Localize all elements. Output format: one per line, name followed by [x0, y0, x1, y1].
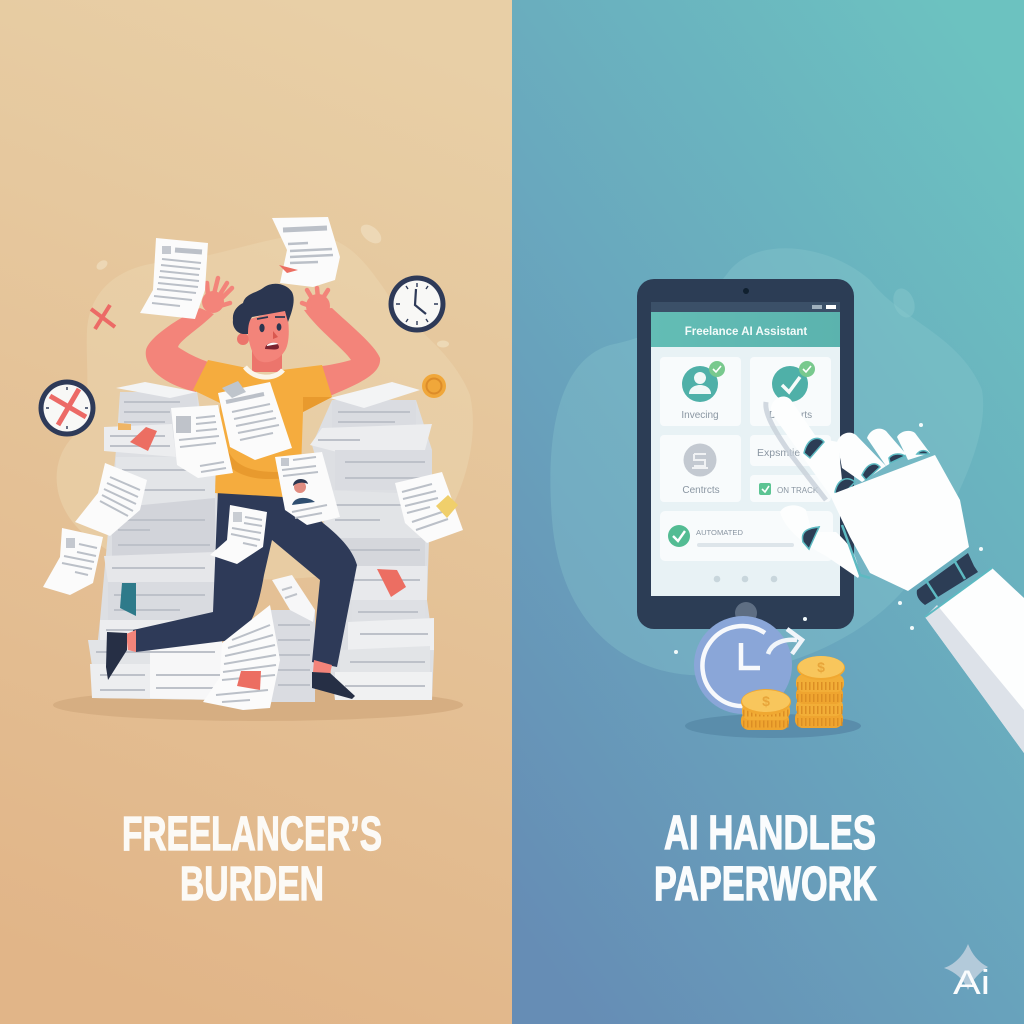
heading: AI handles paperwork: AI HANDLES [664, 807, 876, 860]
thumb [780, 505, 859, 578]
logo: AI star [944, 944, 990, 1002]
card: automated: AUTOMATED [696, 528, 743, 537]
sparkles [674, 423, 983, 654]
palm edge [842, 525, 870, 578]
heading: AI handles paperwork [654, 807, 877, 911]
heading: freelancer's burden: BURDEN [180, 858, 324, 911]
left background [0, 0, 512, 1024]
forearm [925, 568, 1024, 753]
tablet body [637, 279, 854, 629]
paper: resume with portrait [275, 452, 340, 525]
neck [252, 345, 282, 372]
floor shadow [685, 714, 861, 738]
card: invoicing: Invecing [681, 410, 719, 421]
small stack: $ [762, 693, 770, 709]
logo: AI star: Ai [953, 964, 990, 1002]
screen [651, 302, 840, 596]
tablet [637, 279, 854, 629]
left hand [202, 278, 232, 313]
card: documents: D [769, 410, 776, 421]
shirt [193, 360, 332, 498]
mouth [265, 343, 279, 350]
pagination dots [714, 576, 777, 582]
coin stacks [741, 656, 845, 730]
paper: top centre [272, 217, 340, 287]
card: documents: rts [801, 410, 812, 421]
right foot and shoe [312, 660, 355, 699]
index finger [771, 397, 842, 498]
sticky tabs [118, 423, 406, 616]
heading: freelancer's burden [122, 808, 382, 911]
wrist band [917, 553, 978, 605]
paper: right [395, 472, 463, 543]
right arm [304, 308, 380, 396]
paper: bottom left [43, 528, 103, 595]
card: contracts: Centrcts [682, 485, 720, 496]
dark finger joints [802, 438, 929, 549]
left arm [146, 308, 214, 392]
left foot and shoe [106, 630, 136, 680]
card: expenses: Expsmtie [757, 447, 800, 459]
trousers [133, 490, 357, 667]
nose [273, 331, 278, 339]
paper: bottom centre [203, 605, 280, 710]
card: expenses [750, 435, 831, 466]
card: on track [750, 475, 831, 502]
icon: coin [422, 374, 446, 398]
person [106, 278, 380, 699]
paper: on trousers [210, 505, 267, 564]
index finger shadow [766, 402, 826, 500]
camera [743, 288, 749, 294]
card: documents [750, 357, 831, 426]
finger four [897, 431, 930, 460]
large stack: $ [817, 659, 825, 675]
card: automated [660, 511, 833, 561]
icon: crossed clock left [38, 380, 96, 436]
app header: Freelance AI Assistant [685, 326, 807, 338]
app header [651, 312, 840, 347]
icon: red cross [91, 305, 115, 329]
heading: freelancer's burden: FREELANCER’S [122, 808, 382, 861]
card: invoicing [660, 357, 741, 426]
palm [830, 455, 969, 591]
shirt shadow [226, 397, 332, 479]
ear [237, 333, 249, 345]
dark thumb joint [802, 527, 819, 549]
face [247, 308, 289, 362]
floating papers [43, 217, 463, 710]
panel: freelancer's burden [0, 0, 512, 1024]
finger two [837, 433, 886, 482]
card: contracts [660, 435, 741, 502]
robot arm [766, 397, 1024, 753]
decorative oval [889, 285, 919, 321]
finger three [867, 429, 906, 466]
collar [245, 367, 283, 377]
status bar [651, 302, 840, 312]
paper stack: right [270, 382, 434, 702]
home button [735, 602, 757, 624]
paper stack: left [88, 382, 226, 700]
paper: left middle [75, 463, 147, 536]
small paper behind leg [272, 575, 315, 622]
floor shadow [53, 689, 463, 721]
right background [512, 0, 1024, 1024]
paper: centre [218, 381, 292, 460]
panel: AI handles paperwork [512, 0, 1024, 1024]
paper: top left [140, 238, 208, 319]
forearm underside [925, 605, 1024, 753]
right hand [302, 288, 330, 318]
heading: AI handles paperwork: PAPERWORK [654, 858, 877, 911]
paper: centre left [171, 405, 233, 478]
hair [233, 284, 294, 334]
background blob [57, 235, 473, 579]
decorative ovals [95, 221, 449, 348]
background blob [550, 248, 983, 675]
eyes and brows [257, 317, 285, 332]
card: on track: ON TRACK [777, 486, 819, 495]
icon: wall clock right [388, 276, 446, 332]
clock with arrow [694, 616, 802, 714]
